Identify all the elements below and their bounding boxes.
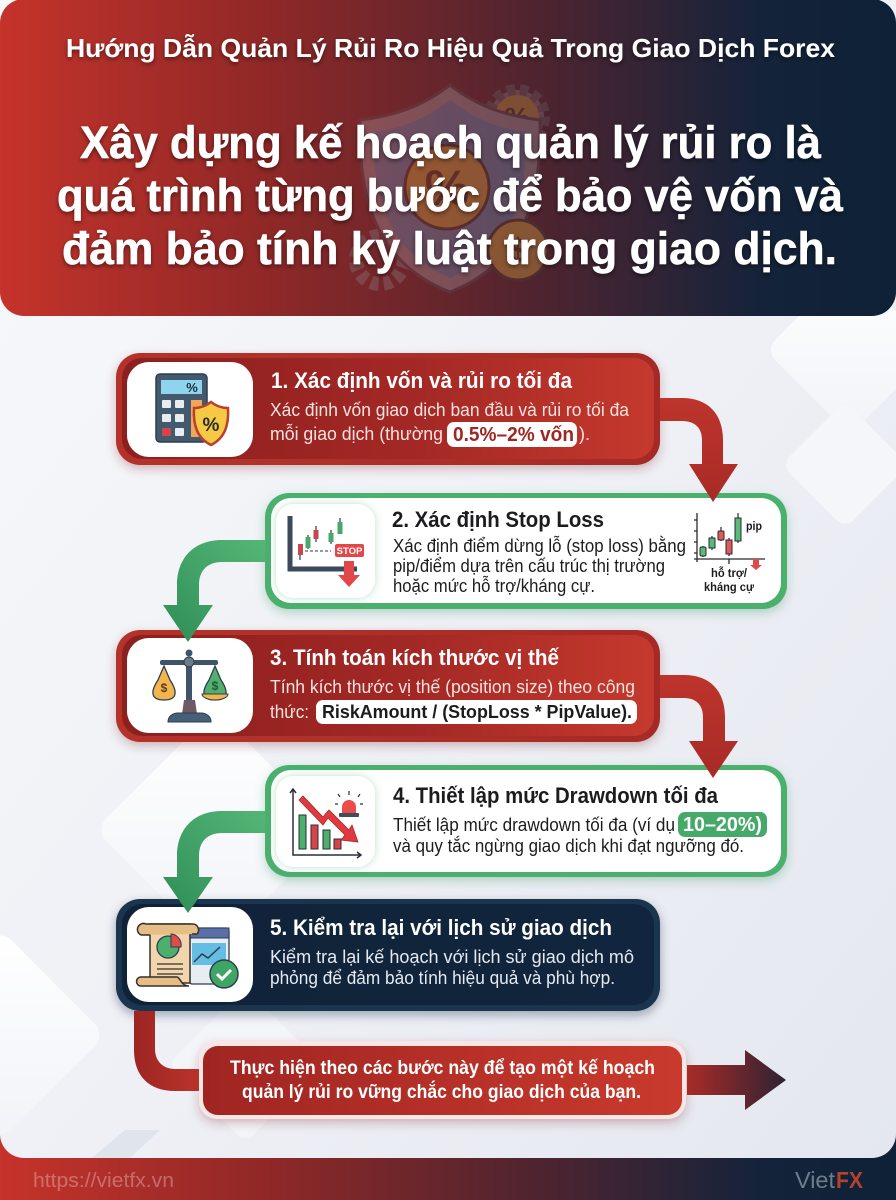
conclusion text: quản lý rủi ro vững chắc cho giao dịch của bạn. [242,1079,641,1103]
step 3 description: RiskAmount / (StopLoss * PipValue). [322,702,632,722]
watermark: shield, gears and coins: $ [509,232,528,270]
mini candlestick chart: pip [746,519,762,533]
arrow: step 2 to step 3 [163,540,265,642]
footer band [0,1120,896,1200]
step 2 description [393,535,686,596]
step 1 description: ). [579,424,590,444]
step 3 description: Tính kích thước vị thế (position size) theo công [270,677,635,697]
icon: stop loss chart: STOP [337,546,363,557]
main headline: Xây dựng kế hoạch quản lý rủi ro là [80,117,822,168]
step 3 title: 3. Tính toán kích thước vị thế [270,645,559,670]
mini candlestick chart: hỗ trợ/ [711,565,748,580]
header panel [0,0,896,316]
panel: step 4 [265,765,787,877]
mini candlestick chart [694,513,765,594]
icon: report and browser check [136,923,238,988]
icon: calculator with shield: % [203,415,220,436]
icon: drawdown chart with alarm [290,789,363,858]
watermark: shield, gears and coins [356,85,548,292]
step 1 description: mỗi giao dịch (thường [270,423,443,444]
main headline: đảm bảo tính kỷ luật trong giao dịch. [62,223,837,274]
step 5 description: Kiểm tra lại kế hoạch với lịch sử giao dịch mô [270,947,634,967]
step 4 description: Thiết lập mức drawdown tối đa (ví dụ [393,815,675,835]
step 1 description: Xác định vốn giao dịch ban đầu và rủi ro tối đa [270,400,630,420]
panel: step 2 [265,493,787,609]
footer logo: Viet [795,1167,836,1193]
icon: calculator with shield: % [186,380,198,395]
step 5 title: 5. Kiểm tra lại với lịch sử giao dịch [270,915,612,940]
panel: step 5 [116,899,660,1011]
conclusion text [230,1057,655,1103]
icon: stop loss chart [290,516,364,587]
main headline [57,117,844,274]
step 4 description: và quy tắc ngừng giao dịch khi đạt ngưỡng đó. [393,835,744,856]
step 1 description: 0.5%–2% vốn [453,424,574,446]
step 2 title: 2. Xác định Stop Loss [392,507,604,532]
icon: balance scale [153,650,228,722]
mini candlestick chart: kháng cự [704,580,754,594]
header subtitle: Hướng Dẫn Quản Lý Rủi Ro Hiệu Quả Trong Giao Dịch Forex [66,33,836,63]
panel: conclusion [199,1041,686,1119]
step 2 description: pip/điểm dựa trên cấu trúc thị trường [393,556,665,576]
watermark: shield, gears and coins: % [505,102,530,133]
step 3 description [270,677,637,724]
step 5 description: phỏng để đảm bảo tính hiệu quả và phù hợp. [270,968,615,988]
step 5 description [270,947,634,988]
step 4 description: 10–20%) [683,814,762,836]
conclusion text: Thực hiện theo các bước này để tạo một kế hoạch [230,1057,655,1079]
step 3 description: thức: [270,702,309,722]
icon: calculator with shield [156,374,228,445]
panel: step 1 [116,353,660,465]
footer logo [795,1167,864,1193]
step 2 description: hoặc mức hỗ trợ/kháng cự. [393,575,595,596]
watermark: shield, gears and coins: % [425,160,469,216]
arrow: step 3 to step 4 [660,675,738,778]
arrow: conclusion outcome [687,1050,786,1110]
step 1 description [270,400,630,447]
step 1 title: 1. Xác định vốn và rủi ro tối đa [271,368,572,393]
footer logo: FX [836,1167,864,1193]
panel: step 3 [116,630,660,742]
main headline: quá trình từng bước để bảo vệ vốn và [57,170,844,221]
arrow: step 5 to conclusion [134,1011,203,1091]
step 2 description: Xác định điểm dừng lỗ (stop loss) bằng [393,535,686,556]
step 4 description [393,812,767,856]
arrow: step 4 to step 5 [163,811,265,913]
arrow: step 1 to step 2 [660,398,738,502]
icon: balance scale: $ [212,679,219,693]
icon: balance scale: $ [161,681,168,695]
step 4 title: 4. Thiết lập mức Drawdown tối đa [393,783,718,808]
footer url: https://vietfx.vn [33,1170,174,1192]
